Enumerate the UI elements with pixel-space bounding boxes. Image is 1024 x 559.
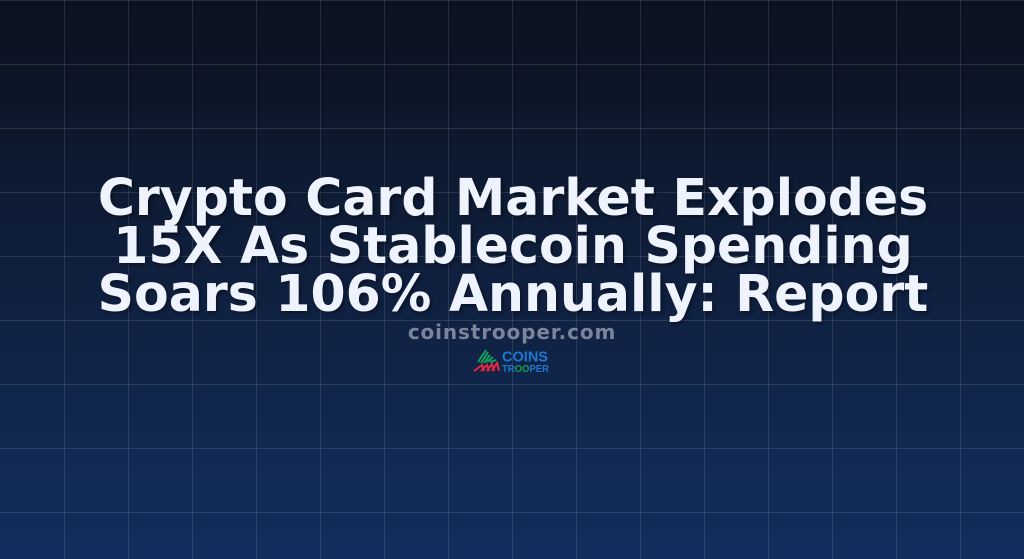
website domain: coinstrooper.com — [408, 320, 616, 344]
logo: Coins Trooper — [474, 348, 549, 374]
title: 15X As Stablecoin Spending — [113, 216, 913, 275]
icon: red rising chart — [474, 363, 499, 371]
title: Soars 106% Annually: Report — [98, 264, 928, 323]
icon: green rising chart — [478, 350, 496, 363]
logo word: COINS: COINS — [502, 348, 548, 366]
title — [98, 168, 930, 325]
title: Crypto Card Market Explodes — [98, 168, 928, 227]
